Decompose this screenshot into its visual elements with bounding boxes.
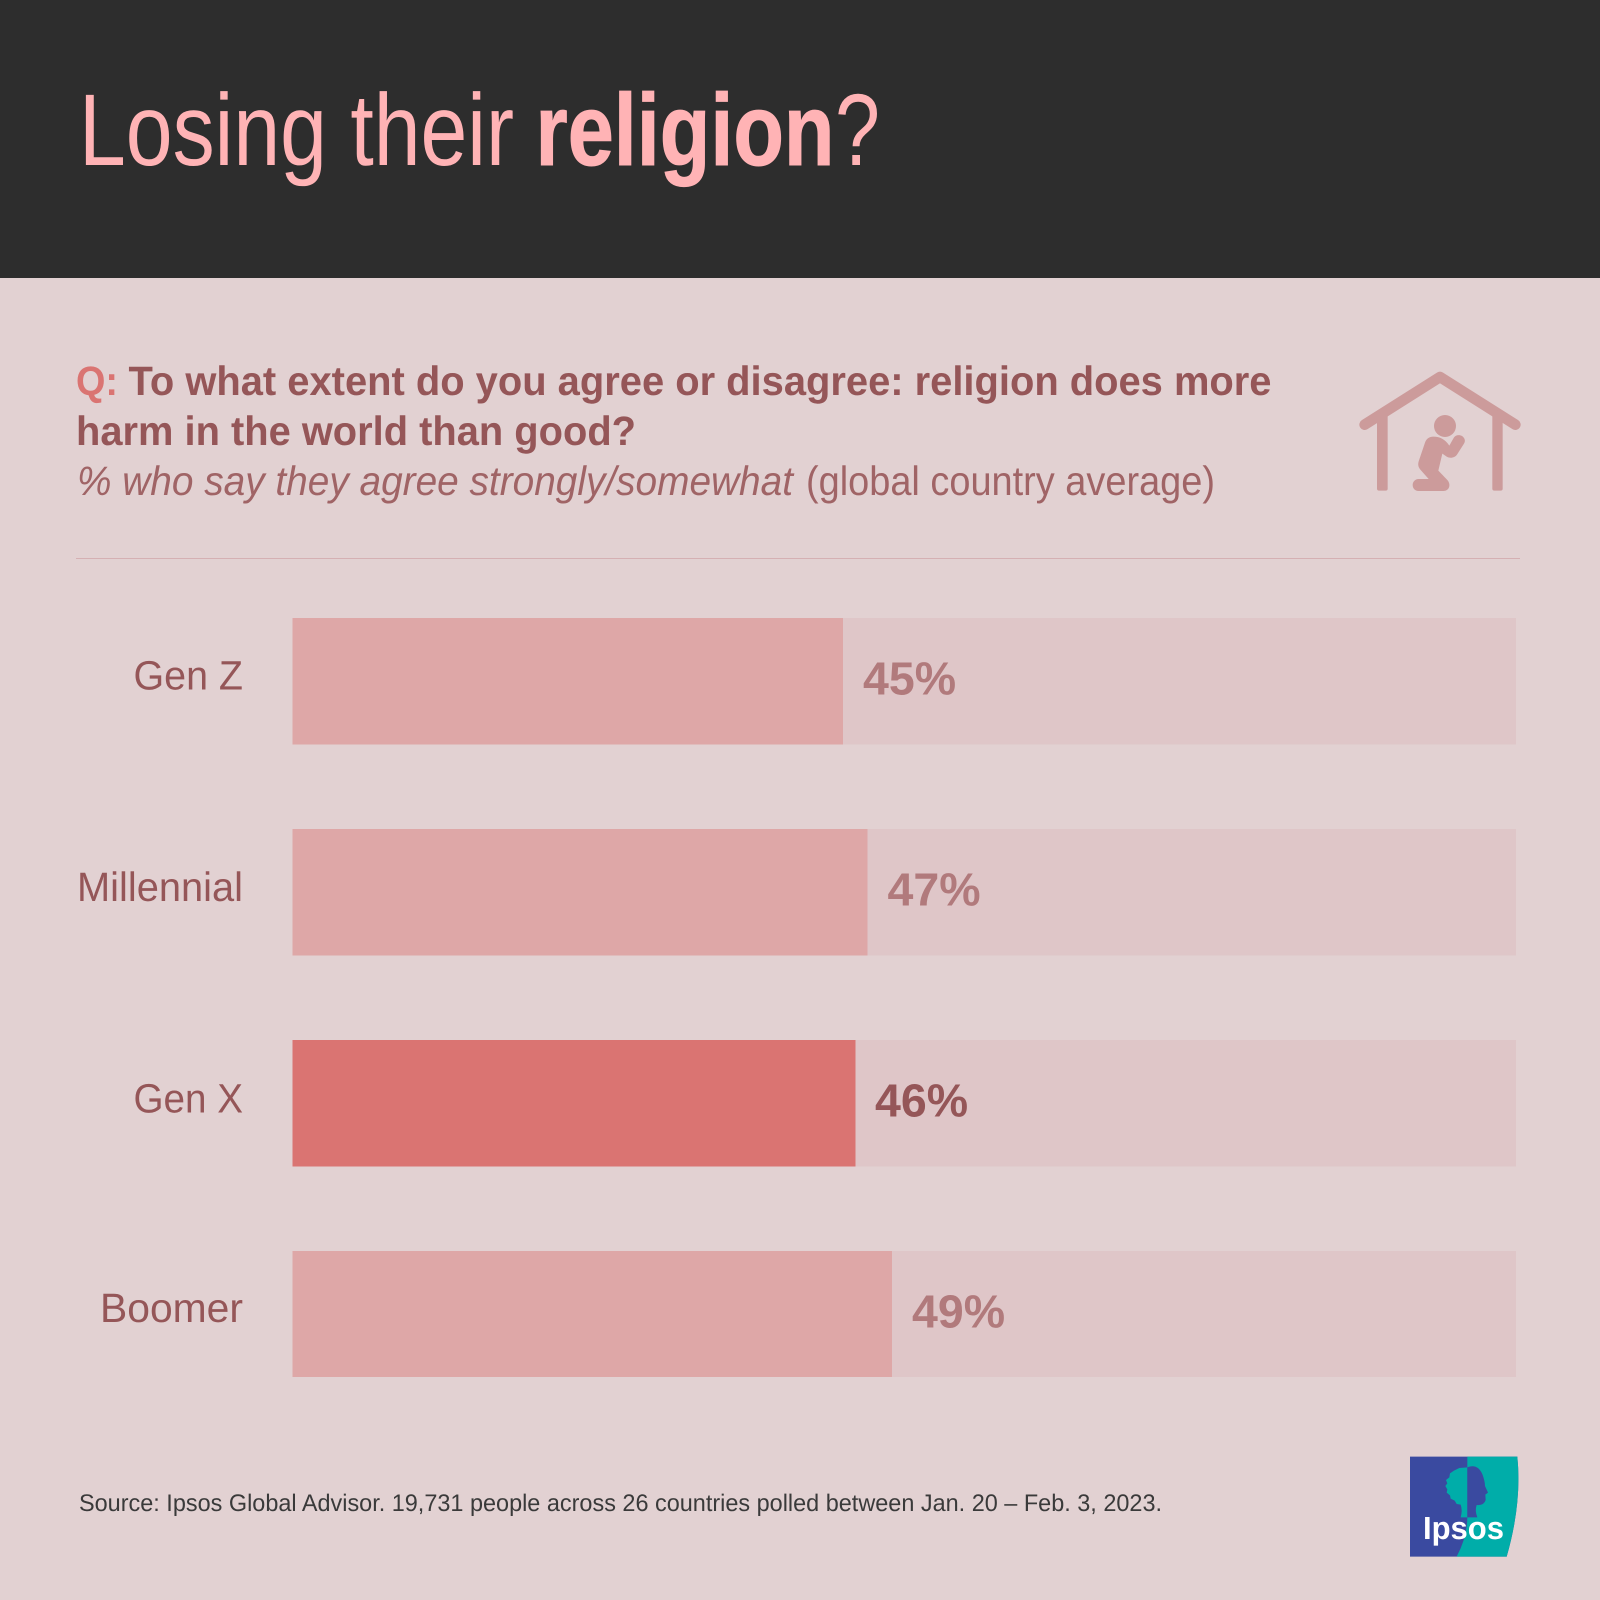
header band — [0, 0, 1600, 278]
icon: person praying in a house — [1365, 377, 1515, 491]
title: religion — [536, 73, 834, 187]
row: Boomer: 49% — [912, 1286, 1005, 1338]
tree crown — [1445, 1467, 1467, 1517]
title — [79, 73, 880, 187]
question text: To what extent do you agree or disagree: religion does more — [128, 358, 1272, 404]
row: Gen X — [134, 1040, 1516, 1166]
question text: Q: — [76, 358, 118, 404]
row: Gen X: 46% — [875, 1074, 968, 1126]
row: Millennial: Millennial — [77, 864, 243, 910]
row: Gen X: Gen X — [134, 1076, 243, 1122]
row: Gen Z — [134, 618, 1516, 744]
question text: (global country average) — [806, 458, 1215, 504]
row: Millennial: 47% — [888, 864, 981, 916]
logo: Ipsos — [1410, 1457, 1518, 1557]
title: ? — [835, 73, 880, 187]
question text — [76, 358, 1272, 504]
logo: Ipsos: Ipsos — [1423, 1510, 1504, 1546]
row: Boomer — [100, 1251, 1516, 1377]
row: Boomer: Boomer — [100, 1285, 243, 1331]
source note: Source: Ipsos Global Advisor. 19,731 people across 26 countries polled between Jan. 20 – Feb. 3, 2023. — [79, 1490, 1162, 1517]
divider — [76, 558, 1520, 559]
profile head — [1467, 1466, 1488, 1517]
row: Gen Z: Gen Z — [134, 652, 243, 698]
question text: harm in the world than good? — [76, 408, 636, 454]
question text: % who say they agree strongly/somewhat — [77, 458, 795, 504]
row: Millennial — [77, 829, 1516, 956]
title: Losing their — [79, 73, 514, 187]
row: Gen Z: 45% — [863, 652, 956, 704]
bar chart — [77, 618, 1516, 1377]
